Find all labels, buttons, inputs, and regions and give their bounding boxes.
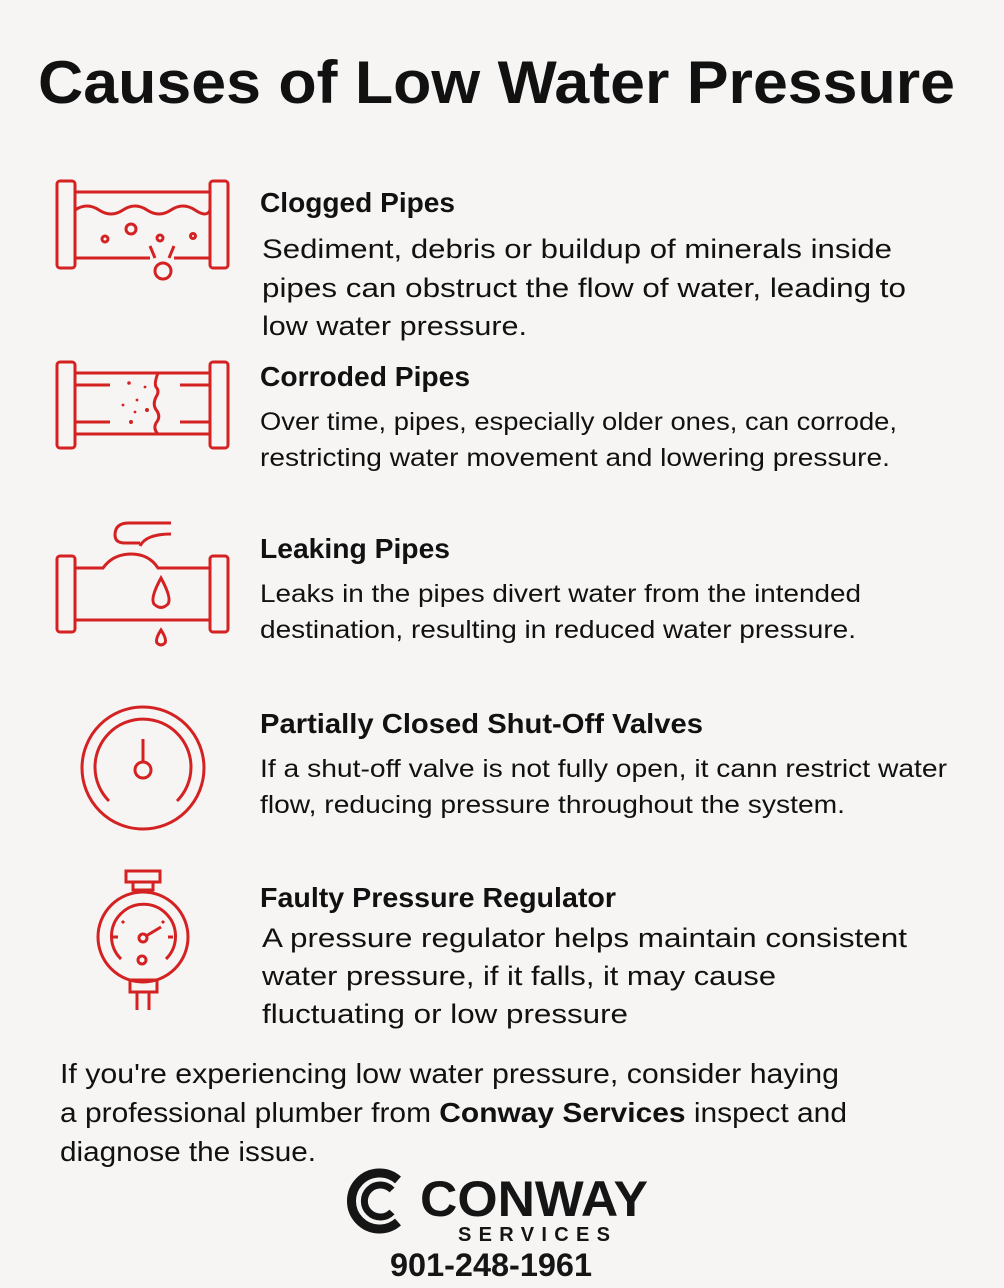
heading: corroded pipes: Corroded Pipes	[260, 361, 470, 392]
footer text: If you're experiencing low water pressure, consider haying	[60, 1058, 839, 1089]
footer text: diagnose the issue.	[60, 1136, 316, 1167]
text: corroded pipes: restricting water movement and lowering pressure.	[260, 444, 890, 472]
text: clogged pipes: Sediment, debris or buildup of minerals inside	[262, 234, 892, 264]
heading: faulty regulator: Faulty Pressure Regulator	[260, 882, 616, 913]
text: faulty regulator: A pressure regulator helps maintain consistent	[262, 923, 908, 953]
logo: conway services: CONWAY	[420, 1171, 648, 1227]
icon: clogged pipe	[57, 181, 228, 279]
text: clogged pipes	[262, 234, 906, 341]
logo: conway services: SERVICES	[458, 1224, 610, 1246]
text: corroded pipes: Over time, pipes, especially older ones, can corrode,	[260, 408, 897, 436]
phone number: 901-248-1961	[390, 1247, 592, 1283]
text: leaking pipes: destination, resulting in reduced water pressure.	[260, 616, 856, 644]
heading: partially closed valves: Partially Closed Shut-Off Valves	[260, 708, 703, 739]
text: faulty regulator: water pressure, if it falls, it may cause	[261, 961, 776, 991]
heading: leaking pipes: Leaking Pipes	[260, 533, 450, 564]
text: leaking pipes: Leaks in the pipes divert water from the intended	[260, 580, 861, 608]
footer text	[60, 1058, 847, 1167]
text: clogged pipes: pipes can obstruct the flow of water, leading to	[262, 273, 906, 303]
text: faulty regulator	[261, 923, 908, 1029]
icon: corroded pipe	[57, 362, 228, 448]
text: partially closed valves	[260, 755, 947, 819]
text: partially closed valves: flow, reducing pressure throughout the system.	[260, 791, 845, 819]
heading: clogged pipes: Clogged Pipes	[260, 187, 455, 218]
logo: conway services	[351, 1171, 648, 1246]
text: clogged pipes: low water pressure.	[262, 311, 527, 341]
title: Causes of Low Water Pressure	[38, 49, 955, 116]
icon: pressure regulator	[98, 871, 188, 1010]
text: corroded pipes	[260, 408, 897, 472]
text: partially closed valves: If a shut-off valve is not fully open, it cann restrict water	[260, 755, 947, 783]
text: leaking pipes	[260, 580, 861, 644]
text: faulty regulator: fluctuating or low pressure	[262, 999, 628, 1029]
icon: leaking pipe	[57, 523, 228, 645]
icon: shut-off valve gauge	[82, 707, 204, 829]
footer text: a professional plumber from Conway Services inspect and	[60, 1097, 847, 1128]
